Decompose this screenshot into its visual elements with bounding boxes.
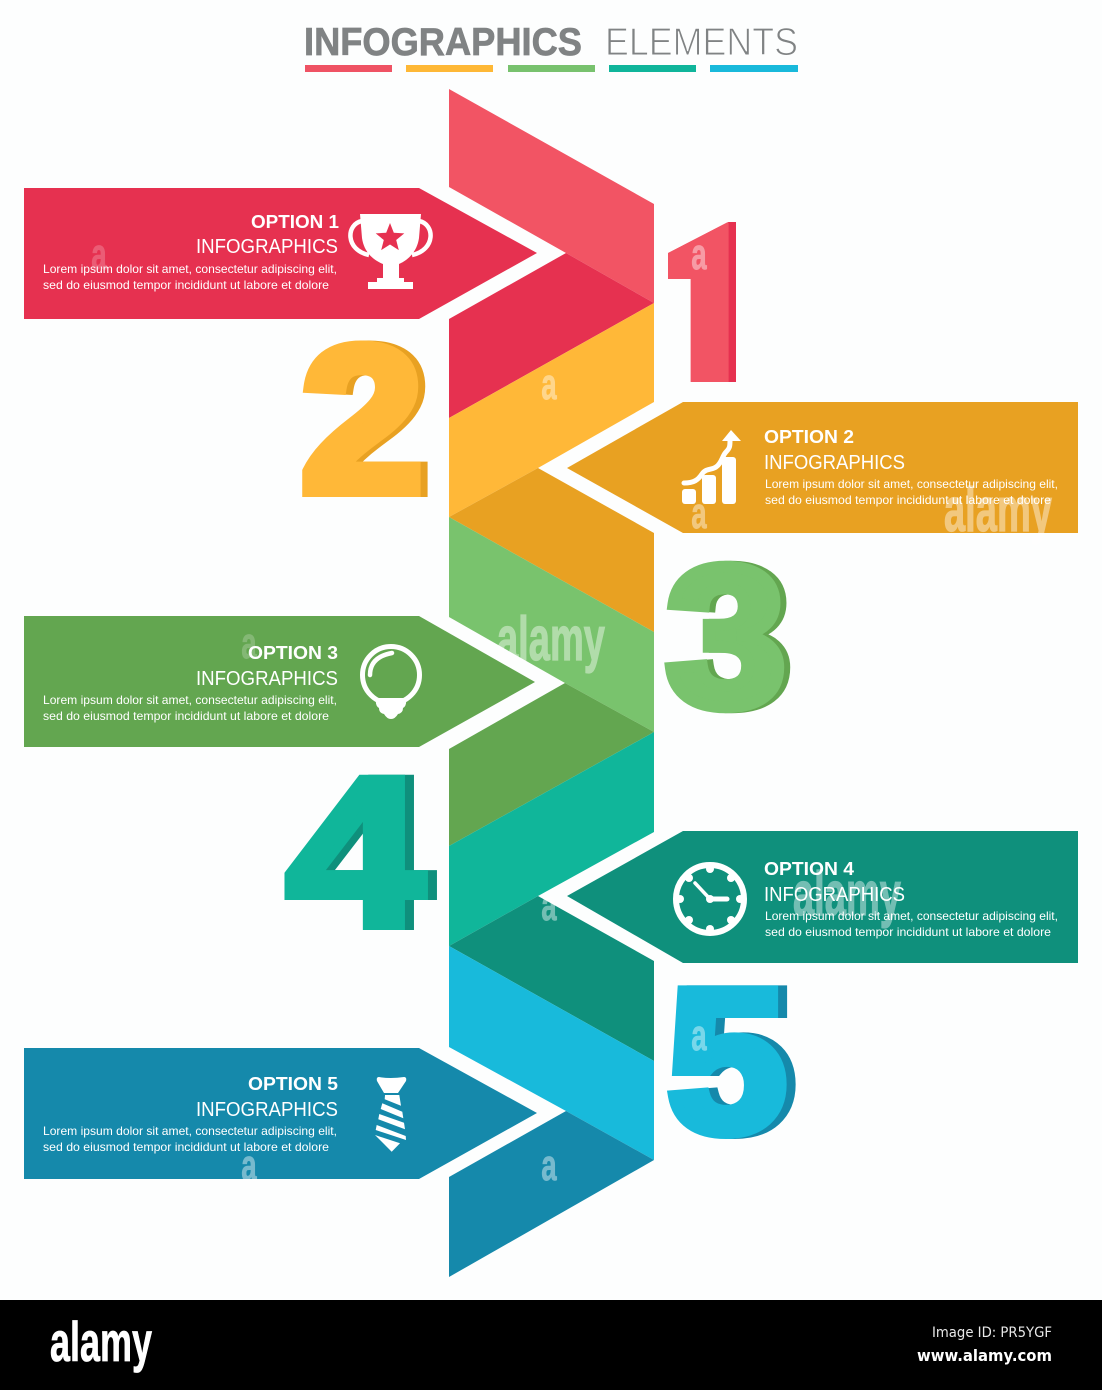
- option 5 text: OPTION 5: [248, 1073, 338, 1094]
- watermarks: a: [91, 229, 107, 279]
- option 5 text: INFOGRAPHICS: [196, 1099, 338, 1121]
- central folded ribbon: [449, 89, 654, 1277]
- icon: necktie: [375, 1077, 406, 1152]
- watermarks: a: [691, 229, 707, 279]
- option 4 text: OPTION 4: [764, 858, 855, 879]
- number 2: 2: [308, 305, 430, 536]
- number 5: 5: [677, 949, 795, 1175]
- watermarks: a: [241, 1140, 257, 1190]
- option 1 text: Lorem ipsum dolor sit amet, consectetur adipiscing elit,: [43, 262, 337, 276]
- option 2 text: Lorem ipsum dolor sit amet, consectetur adipiscing elit,: [765, 477, 1058, 491]
- footer url: www.alamy.com: [917, 1346, 1052, 1365]
- watermarks: a: [691, 488, 707, 538]
- footer image id: Image ID: PR5YGF: [932, 1325, 1052, 1341]
- watermarks: alamy: [793, 860, 901, 929]
- watermarks: [91, 229, 1052, 1190]
- number 3: 3: [673, 525, 791, 747]
- number 4: 4: [294, 733, 434, 972]
- footer logo: alamy: [50, 1310, 152, 1373]
- watermarks: a: [541, 359, 557, 409]
- option 5 text: sed do eiusmod tempor incididunt ut labore et dolore: [43, 1140, 329, 1154]
- watermarks: alamy: [497, 605, 605, 674]
- option 1 text: sed do eiusmod tempor incididunt ut labore et dolore: [43, 278, 329, 292]
- option 3 text: Lorem ipsum dolor sit amet, consectetur adipiscing elit,: [43, 693, 337, 707]
- option 4 text: Lorem ipsum dolor sit amet, consectetur adipiscing elit,: [765, 909, 1058, 923]
- title: INFOGRAPHICS: [304, 21, 582, 64]
- watermarks: a: [541, 1140, 557, 1190]
- option 2 text: OPTION 2: [764, 426, 854, 447]
- option 3 text: INFOGRAPHICS: [196, 668, 338, 690]
- number 5: 5: [668, 949, 786, 1175]
- watermarks: a: [241, 618, 257, 668]
- icon: trophy: [350, 214, 431, 289]
- icon: growth chart: [682, 430, 741, 504]
- option 1 text: [43, 211, 339, 292]
- panel: option 3: [24, 616, 535, 747]
- option 4 text: sed do eiusmod tempor incididunt ut labore et dolore: [765, 925, 1051, 939]
- icon: light bulb: [362, 646, 420, 719]
- number 2: 2: [301, 305, 423, 536]
- option 5 text: Lorem ipsum dolor sit amet, consectetur adipiscing elit,: [43, 1124, 337, 1138]
- panel: option 1: [24, 188, 537, 319]
- panel: option 5: [24, 1048, 537, 1179]
- icon: clock: [676, 865, 744, 933]
- option 2 text: INFOGRAPHICS: [764, 452, 905, 474]
- option 3 text: [43, 642, 338, 723]
- title: ELEMENTS: [605, 21, 798, 64]
- panel: option 4: [567, 831, 1078, 963]
- panel: option 2: [567, 402, 1078, 533]
- option 4 text: INFOGRAPHICS: [764, 884, 905, 906]
- option 1 text: INFOGRAPHICS: [196, 236, 338, 258]
- title: [304, 21, 798, 64]
- option 3 text: sed do eiusmod tempor incididunt ut labore et dolore: [43, 709, 329, 723]
- option 3 text: OPTION 3: [248, 642, 338, 663]
- title colour bars: [305, 65, 798, 72]
- option 5 text: [43, 1073, 338, 1154]
- number 4: 4: [285, 733, 425, 972]
- footer bar: [0, 1300, 1102, 1390]
- option 1 text: OPTION 1: [251, 211, 339, 232]
- number 1: 1: [626, 162, 780, 472]
- option 4 text: [764, 858, 1058, 939]
- option 2 text: sed do eiusmod tempor incididunt ut labore et dolore: [765, 493, 1051, 507]
- number 3: 3: [667, 525, 785, 747]
- watermarks: a: [541, 880, 557, 930]
- number 1: [668, 222, 736, 382]
- watermarks: a: [691, 1010, 707, 1060]
- option 2 text: [764, 426, 1058, 507]
